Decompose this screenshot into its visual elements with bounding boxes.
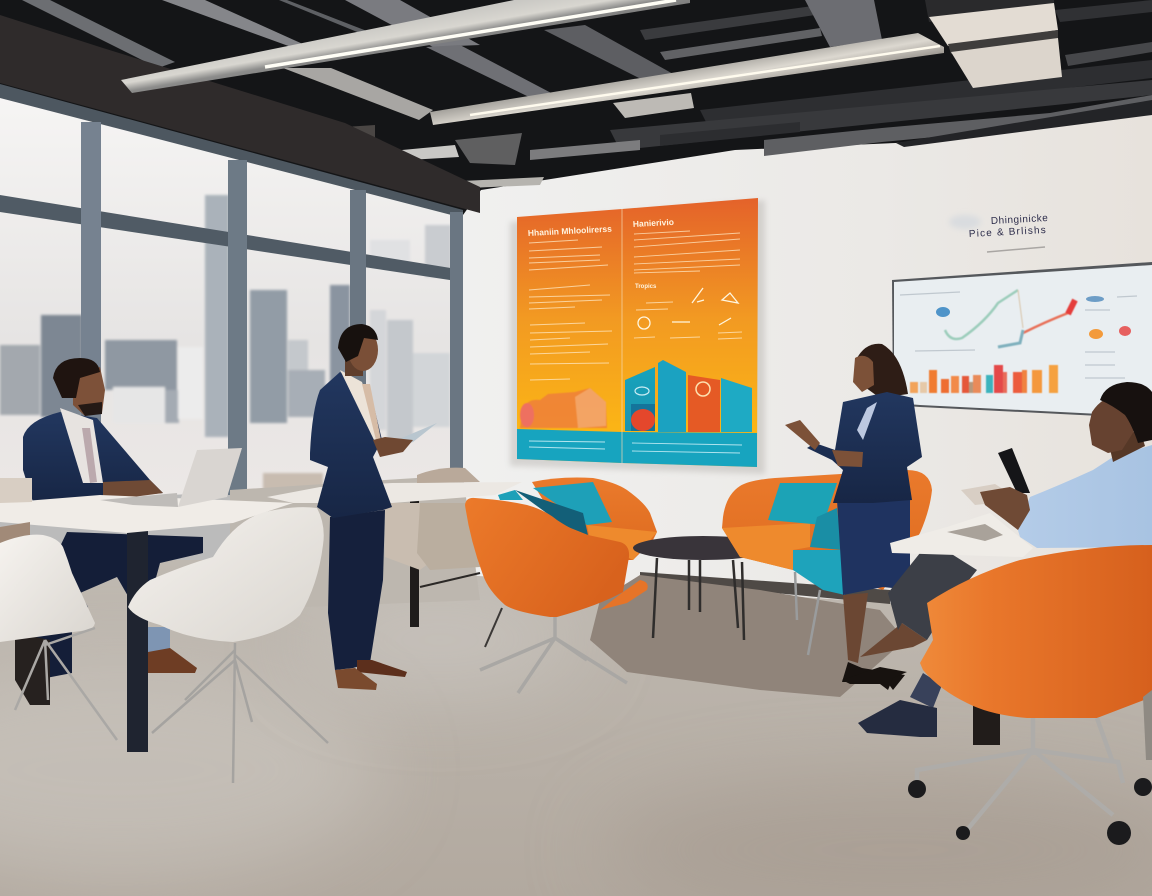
diagonal silver pipe [283,68,433,120]
beard [78,402,102,416]
wall heading: Dhinginicke [991,213,1049,227]
poster bottom teal band [517,429,757,467]
trousers [15,532,203,683]
teal chair [793,508,845,655]
upper leg skin [860,623,927,657]
white chair front [128,507,328,783]
front table with laptop [0,448,293,752]
poster sub heading: Tropics [635,284,657,290]
skyline buildings [0,195,451,490]
poster illustration left [520,388,607,428]
orange lounge chair back [532,478,657,560]
chart blobs [936,307,950,317]
papers [947,524,1003,541]
table leg [973,700,1000,745]
wall heading [949,213,1049,252]
shoe [858,700,937,737]
poster small icons [638,288,738,329]
pipes on ceiling edge [345,93,1152,189]
ceiling light tube 1 [121,0,690,93]
jacket [807,392,922,503]
poster building graphics [625,360,752,432]
hands [103,480,163,498]
neck [1108,430,1145,462]
other hand [832,450,863,467]
head [348,329,378,371]
sandal [842,662,905,690]
orange sofa right [722,470,932,590]
blouse [857,402,877,440]
poster on wall [510,198,765,474]
jacket [310,372,392,518]
trousers [328,510,385,670]
ceiling air vent boxes [925,0,1062,88]
tie [82,428,97,483]
hair [338,324,378,362]
boot [15,633,50,705]
poster heading left: Hhaniin Mhloolirerss [528,224,612,238]
neck [345,358,363,376]
table top [890,513,1033,557]
hair [856,344,908,398]
baseboard shadow [640,572,890,604]
ceiling light tube 2 [430,33,944,125]
ducts [22,0,1152,150]
shirt [340,370,381,440]
head [1089,395,1136,453]
chair base [480,617,627,693]
legs [843,593,868,663]
trousers [837,500,910,595]
heel shoe [842,667,907,690]
hand [373,437,413,457]
back table [267,482,522,627]
coffee table [633,536,773,640]
floor [0,560,1152,896]
teal cushions [498,482,612,535]
big orange chair [908,545,1152,845]
torso [23,412,163,502]
hair [53,358,100,398]
tablet [397,423,437,446]
white chair left [0,478,117,740]
brown shoe [148,648,197,673]
wall heading: Pice & Brlishs [969,225,1046,240]
beige chairs back [385,468,480,587]
tablet [998,448,1030,493]
shirt [1017,445,1152,548]
head [853,356,874,392]
rug [590,575,905,697]
poster body text lines [529,231,742,453]
orange lounge chair front [465,498,648,693]
white wall [463,113,1152,620]
left upper wall soffit [0,15,480,213]
shirt [60,408,103,483]
hair [1100,382,1152,443]
hands [980,487,1030,530]
window with skyline [0,84,463,505]
trousers [888,553,977,640]
bar chart [910,365,1058,393]
standing man [310,324,437,690]
lower leg [910,673,942,708]
laptop [100,493,178,507]
ceiling [0,0,1152,225]
head [73,367,105,416]
woman presenter [785,344,922,690]
shoes [357,660,407,677]
seated man left [15,358,203,705]
jeans cuff [148,627,170,653]
whiteboard chart screen [892,262,1152,416]
side table with seated man [842,382,1152,745]
window frame [0,84,463,495]
pointing hand [785,420,820,450]
area below window [230,475,480,610]
poster heading right: Hanierivio [633,217,674,229]
line curves [945,290,1075,347]
chair base [917,718,1123,830]
